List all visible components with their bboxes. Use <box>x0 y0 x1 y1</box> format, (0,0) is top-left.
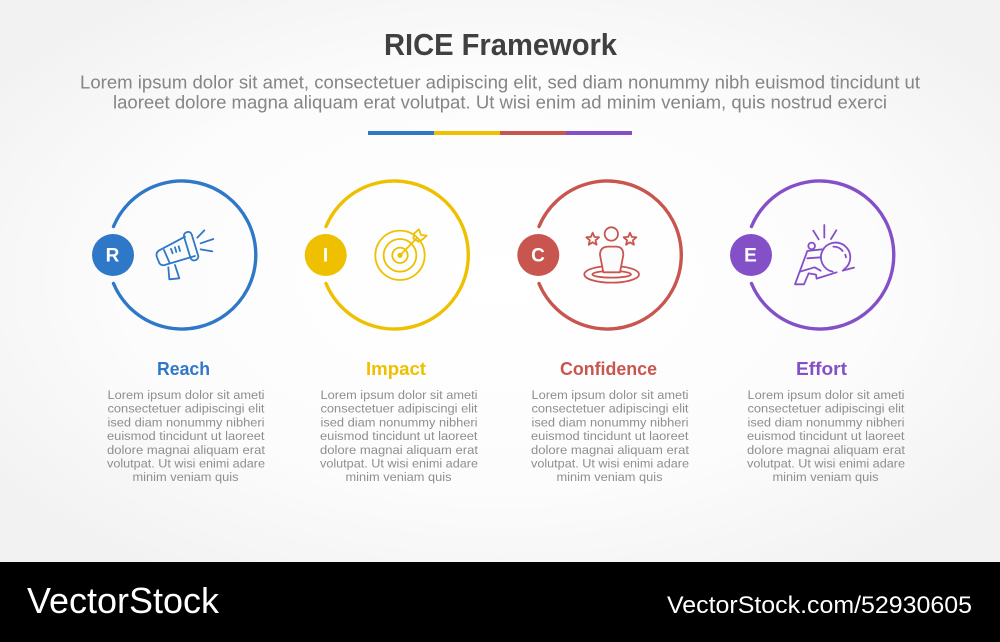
subtitle text: laoreet dolore magna aliquam erat volutpat. Ut wisi enim ad minim veniam, quis nostrud exerci <box>113 92 887 112</box>
text block: impact: minim veniam quis <box>346 470 452 484</box>
badge: C: C <box>531 246 545 266</box>
text block: confidence: dolore magnai aliquam erat <box>531 443 690 457</box>
badge: E <box>730 234 772 276</box>
footer url text: VectorStock.com/52930605 <box>667 592 972 619</box>
panel: reach <box>92 181 266 484</box>
text block: effort: volutpat. Ut wisi enimi adare <box>747 456 905 470</box>
panel: confidence <box>517 181 690 484</box>
text block: reach: euismod tincidunt ut laoreet <box>107 429 265 443</box>
four colour divider bar <box>368 131 632 135</box>
text block: confidence: volutpat. Ut wisi enimi adare <box>531 456 689 470</box>
panel: effort <box>730 181 906 484</box>
badge: R <box>92 234 134 276</box>
subtitle text: Lorem ipsum dolor sit amet, consectetuer adipiscing elit, sed diam nonummy nibh euismod tincidunt ut <box>80 72 920 92</box>
text block: reach: dolore magnai aliquam erat <box>107 443 266 457</box>
text block: reach: ised diam nonummy nibheri <box>108 415 264 429</box>
badge: I: I <box>323 246 328 266</box>
text block: reach: minim veniam quis <box>132 470 238 484</box>
text block: reach: volutpat. Ut wisi enimi adare <box>107 456 265 470</box>
heading: effort: Effort <box>796 358 847 379</box>
text block: confidence: consectetuer adipiscingi elit <box>532 402 689 416</box>
icon: person pushing boulder <box>795 225 854 284</box>
text block: confidence: minim veniam quis <box>556 470 662 484</box>
ring: confidence <box>539 181 681 329</box>
ring: effort <box>752 181 894 329</box>
icon: target with arrow <box>375 229 427 280</box>
icon: megaphone <box>157 230 213 279</box>
text block: effort <box>747 388 906 484</box>
heading: reach: Reach <box>157 358 210 379</box>
subtitle text <box>80 72 920 112</box>
panel: impact <box>305 181 479 484</box>
text block: reach: Lorem ipsum dolor sit ameti <box>108 388 264 402</box>
footer logo text: VectorStock <box>27 580 220 621</box>
badge: R: R <box>106 246 120 266</box>
text block: effort: Lorem ipsum dolor sit ameti <box>748 388 904 402</box>
text block: reach <box>107 388 266 484</box>
text block: reach: consectetuer adipiscingi elit <box>108 402 265 416</box>
title: RICE Framework <box>384 27 618 62</box>
badge: I <box>305 234 347 276</box>
heading: confidence: Confidence <box>560 358 657 379</box>
text block: impact <box>320 388 479 484</box>
text block: confidence: euismod tincidunt ut laoreet <box>531 429 689 443</box>
text block: effort: consectetuer adipiscingi elit <box>748 402 905 416</box>
footer band <box>0 562 1000 642</box>
text block: impact: Lorem ipsum dolor sit ameti <box>320 388 478 402</box>
text block: effort: minim veniam quis <box>772 470 878 484</box>
text block: impact: volutpat. Ut wisi enimi adare <box>320 456 478 470</box>
text block: confidence: Lorem ipsum dolor sit ameti <box>532 388 688 402</box>
text block: effort: euismod tincidunt ut laoreet <box>747 429 905 443</box>
ring: impact <box>326 181 468 329</box>
text block: confidence <box>531 388 690 484</box>
text block: impact: euismod tincidunt ut laoreet <box>320 429 478 443</box>
icon: person with stars <box>584 227 639 283</box>
text block: impact: dolore magnai aliquam erat <box>320 443 479 457</box>
text block: impact: consectetuer adipiscingi elit <box>320 402 478 416</box>
text block: confidence: ised diam nonummy nibheri <box>532 415 688 429</box>
text block: effort: dolore magnai aliquam erat <box>747 443 906 457</box>
badge: E: E <box>744 246 757 266</box>
badge: C <box>517 234 559 276</box>
text block: impact: ised diam nonummy nibheri <box>320 415 478 429</box>
heading: impact: Impact <box>366 358 426 379</box>
text block: effort: ised diam nonummy nibheri <box>748 415 904 429</box>
ring: reach <box>114 181 256 329</box>
